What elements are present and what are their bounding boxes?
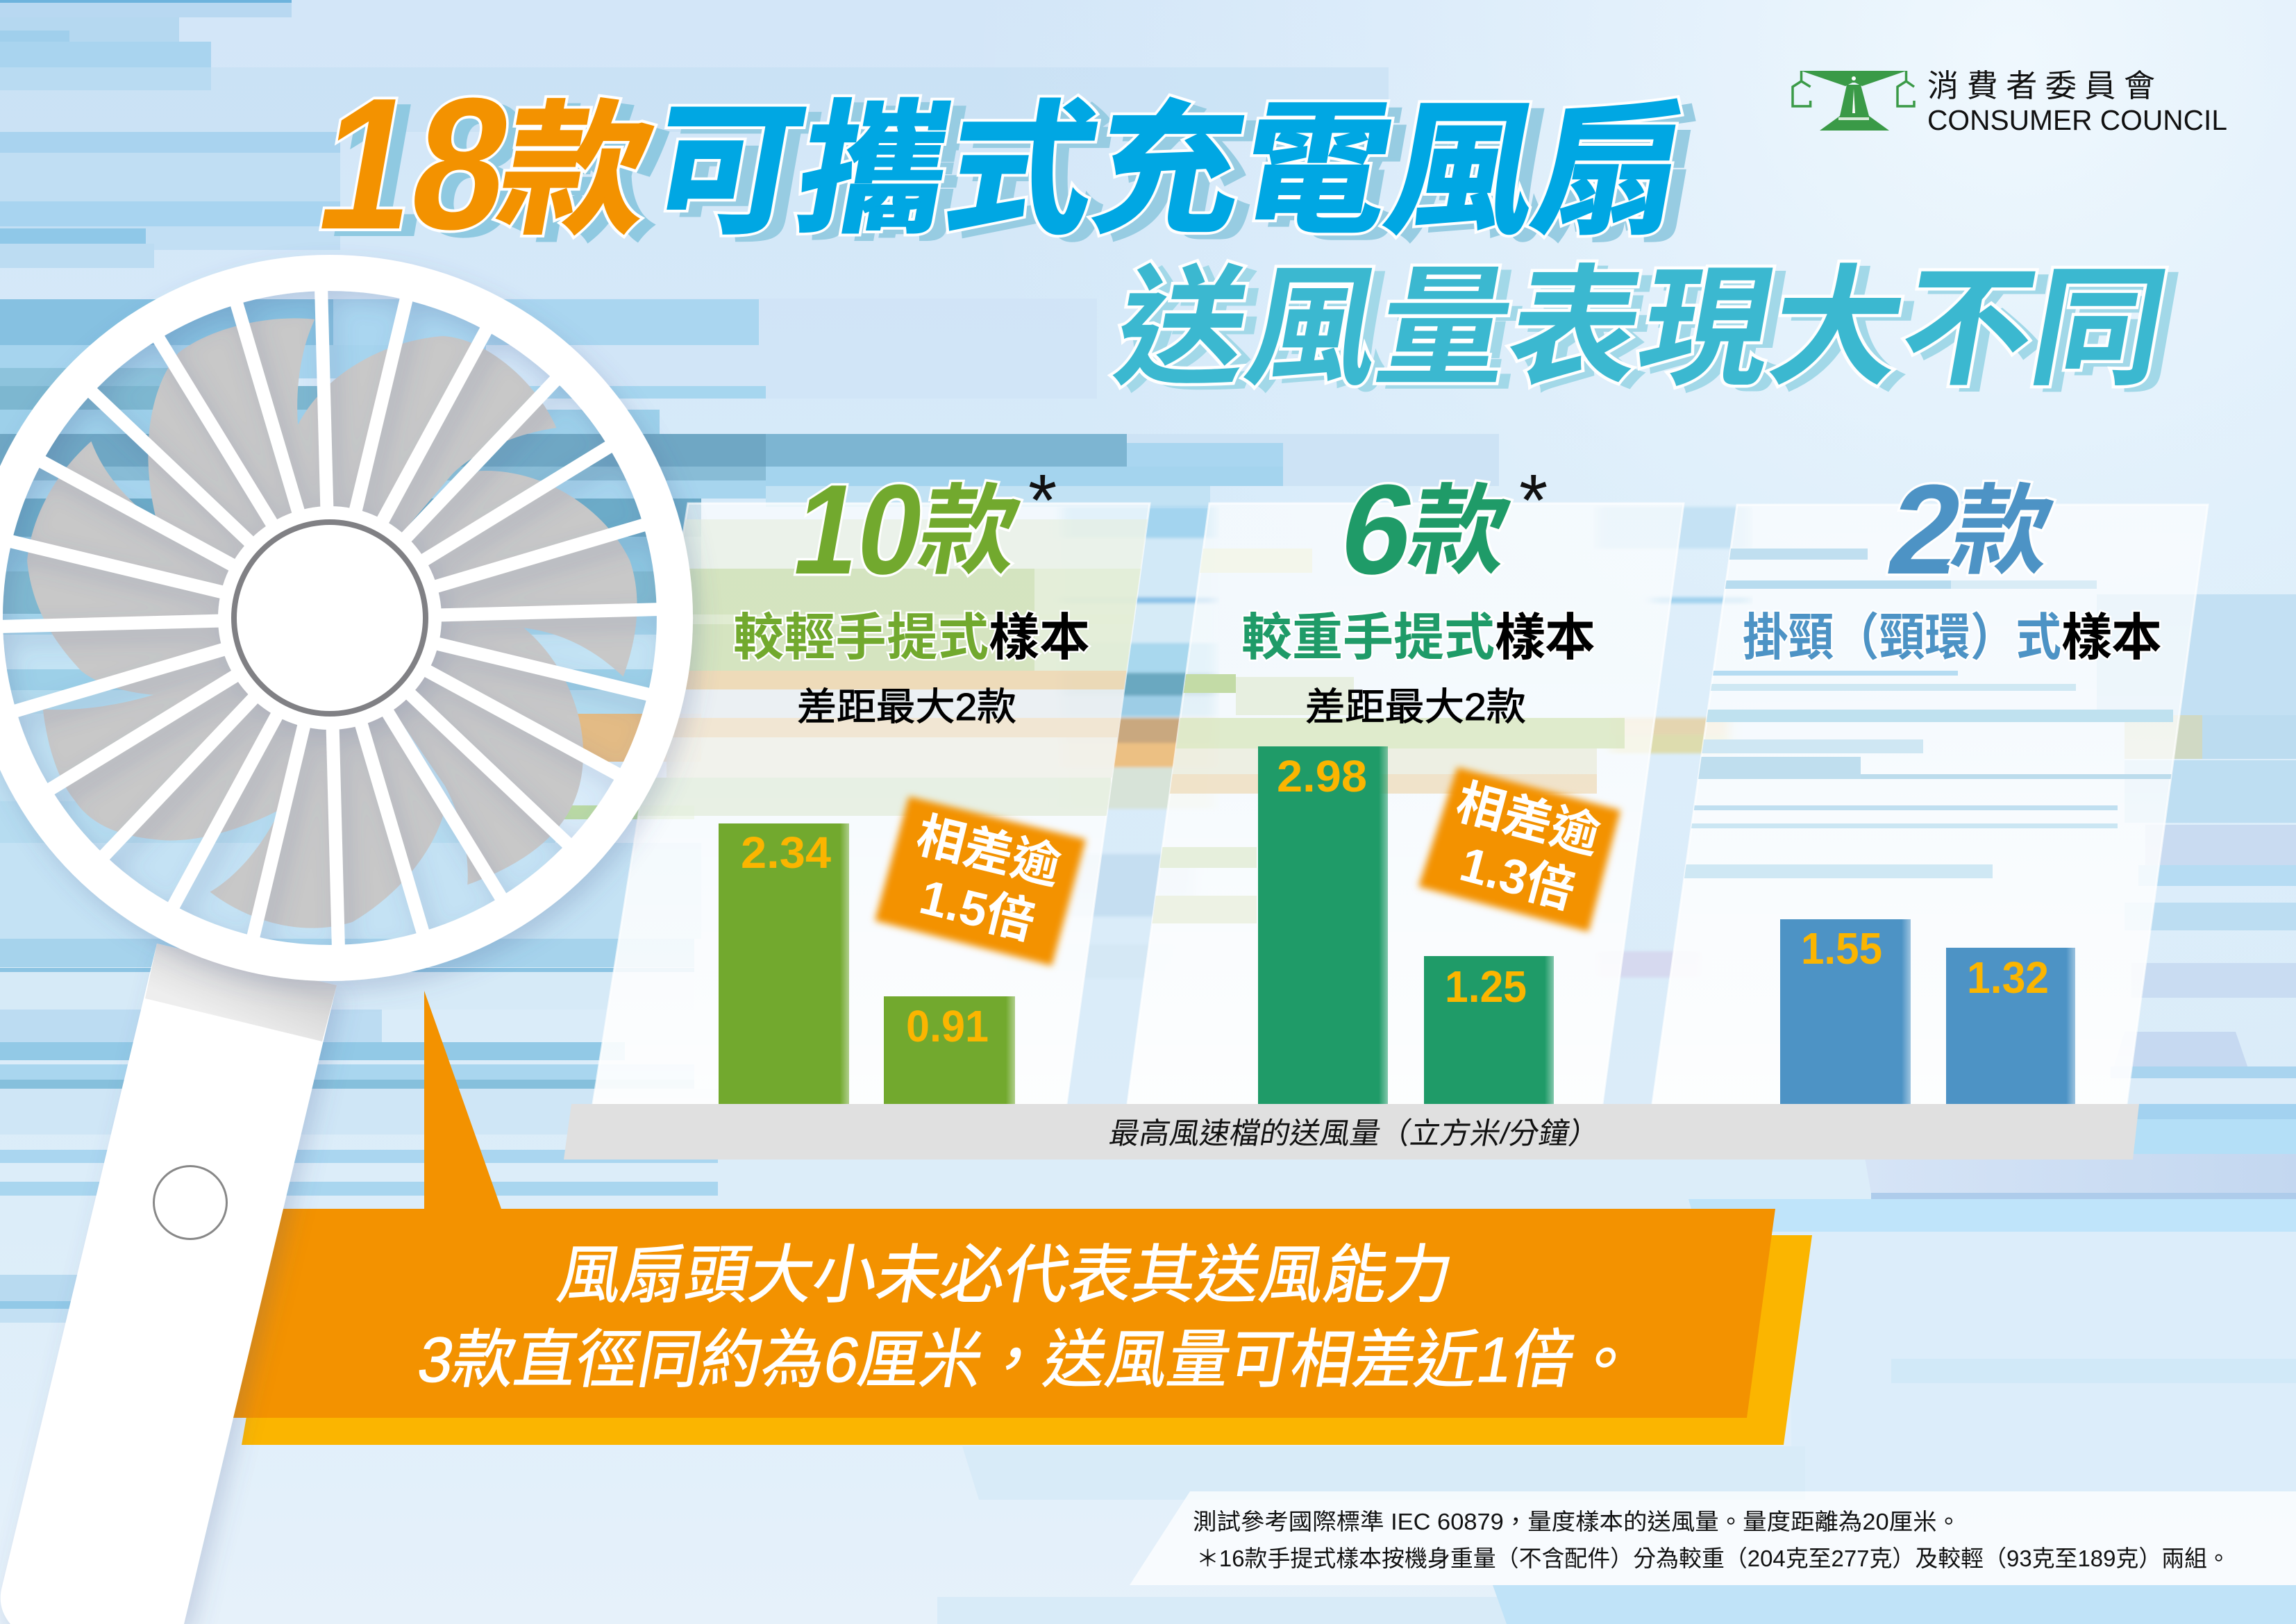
- subheading: 樣本: [989, 610, 1090, 666]
- count heading 6款: 6: [1331, 458, 1425, 601]
- bar 0.91: [884, 996, 1015, 1104]
- fan handle: [1, 944, 337, 1624]
- right side bands: [937, 594, 2296, 1624]
- count heading 2款: [1879, 458, 2061, 601]
- callout line 2: 3款直徑同約為6厘米，送風量可相差近1倍。: [413, 1324, 1643, 1396]
- asterisk: *: [1028, 460, 1057, 542]
- axis label bar: 最高風速檔的送風量（立方米/分鐘）: [1107, 1117, 1602, 1150]
- badge: 1.3 times: 相差逾: [1451, 774, 1605, 864]
- bar 2.34: 2.34: [741, 828, 831, 878]
- bar 1.25: [1424, 956, 1554, 1104]
- badge: 1.5 times: [875, 796, 1086, 966]
- count heading 10款: 款: [912, 476, 1028, 587]
- count heading 6款: 款: [1402, 476, 1518, 587]
- title line 2: 送風量表現大不同: [1116, 260, 2188, 407]
- title line 1: 18: [318, 65, 540, 275]
- title line 1: 可攜式充電風扇: [653, 97, 1712, 258]
- footnote line 2: ＊16款手提式樣本按機身重量（不含配件）分為較重（204克至277克）及較輕（93克至189克）兩組。: [1196, 1546, 2230, 1571]
- title line 1: 款: [502, 97, 678, 258]
- orange number 18: 18: [304, 59, 526, 269]
- badge: 1.3 times: 1.3倍: [1455, 837, 1581, 919]
- fan blades: [27, 318, 637, 928]
- teal title words: 送風量表現大不同: [1105, 256, 2177, 402]
- blue title words: 可攜式充電風扇: [639, 90, 1698, 252]
- logo mark: green scales: [1793, 71, 1914, 131]
- axis label bar: [564, 1104, 2139, 1160]
- footnote line 1: 測試參考國際標準 IEC 60879，量度樣本的送風量。量度距離為20厘米。: [1193, 1509, 1961, 1534]
- badge: 1.3 times: [1418, 767, 1620, 932]
- panel tint streaks: [625, 519, 1153, 816]
- panel blue streaks: [1684, 549, 2173, 878]
- panel tint streaks: [1139, 549, 1625, 923]
- asterisk: *: [1519, 460, 1548, 542]
- gap note: 差距最大2款: [797, 685, 1016, 728]
- footnote panel: [1130, 1491, 2296, 1585]
- bar 1.55: [1780, 919, 1911, 1104]
- bar 0.91: 0.91: [906, 1001, 989, 1051]
- bar 1.32: [1946, 948, 2075, 1104]
- icon: handheld fan: [0, 255, 693, 1624]
- count heading 2款: 款: [1945, 476, 2061, 587]
- logo: Consumer Council: [1793, 68, 2227, 136]
- bar 1.32: 1.32: [1967, 953, 2049, 1003]
- gap note: 差距最大2款: [1305, 685, 1526, 728]
- callout main shape with pointer: [233, 991, 1775, 1418]
- badge: 1.5 times: 相差逾: [912, 807, 1066, 895]
- gap streaks between second and third panels: [1597, 507, 1750, 978]
- callout back layer: [242, 1235, 1812, 1445]
- logo Chinese name: 消費者委員會: [1927, 68, 2155, 103]
- count heading 10款: [784, 458, 1028, 601]
- orange 款 thickening: 款: [488, 90, 664, 252]
- bar 1.55: 1.55: [1801, 923, 1882, 973]
- count heading 10款: 10: [784, 458, 935, 601]
- bar 2.98: 2.98: [1277, 751, 1367, 801]
- blue title thickening: 可攜式充電風扇: [639, 90, 1698, 252]
- badge: 1.5 times: 1.5倍: [914, 869, 1041, 950]
- subheading: 較輕手提式: [733, 610, 989, 666]
- logo English name: CONSUMER COUNCIL: [1927, 104, 2227, 136]
- subheading: 樣本: [1495, 610, 1595, 666]
- callout: fan size note: [233, 991, 1812, 1445]
- count heading 6款: [1331, 458, 1518, 601]
- bar 2.34: [719, 823, 849, 1104]
- subheading: 較重手提式: [1241, 610, 1495, 666]
- subheading: 樣本: [2061, 610, 2162, 666]
- callout line 1: 風扇頭大小未必代表其送風能力: [553, 1239, 1459, 1311]
- gap streaks between first and second panels: [1000, 507, 1215, 979]
- bar 2.98: [1258, 746, 1388, 1104]
- fan grille ring, spokes and hub: [0, 255, 693, 981]
- title line 1: [304, 59, 1712, 275]
- orange 款: 款: [488, 90, 664, 252]
- bar 1.25: 1.25: [1445, 962, 1527, 1012]
- panel: heavier handheld: [1128, 458, 1684, 1104]
- panel: neck-mounted: [1652, 458, 2208, 1104]
- count heading 2款: 2: [1879, 458, 1973, 601]
- panel: lighter handheld: [593, 458, 1153, 1104]
- subheading: 掛頸（頸環）式: [1743, 610, 2061, 666]
